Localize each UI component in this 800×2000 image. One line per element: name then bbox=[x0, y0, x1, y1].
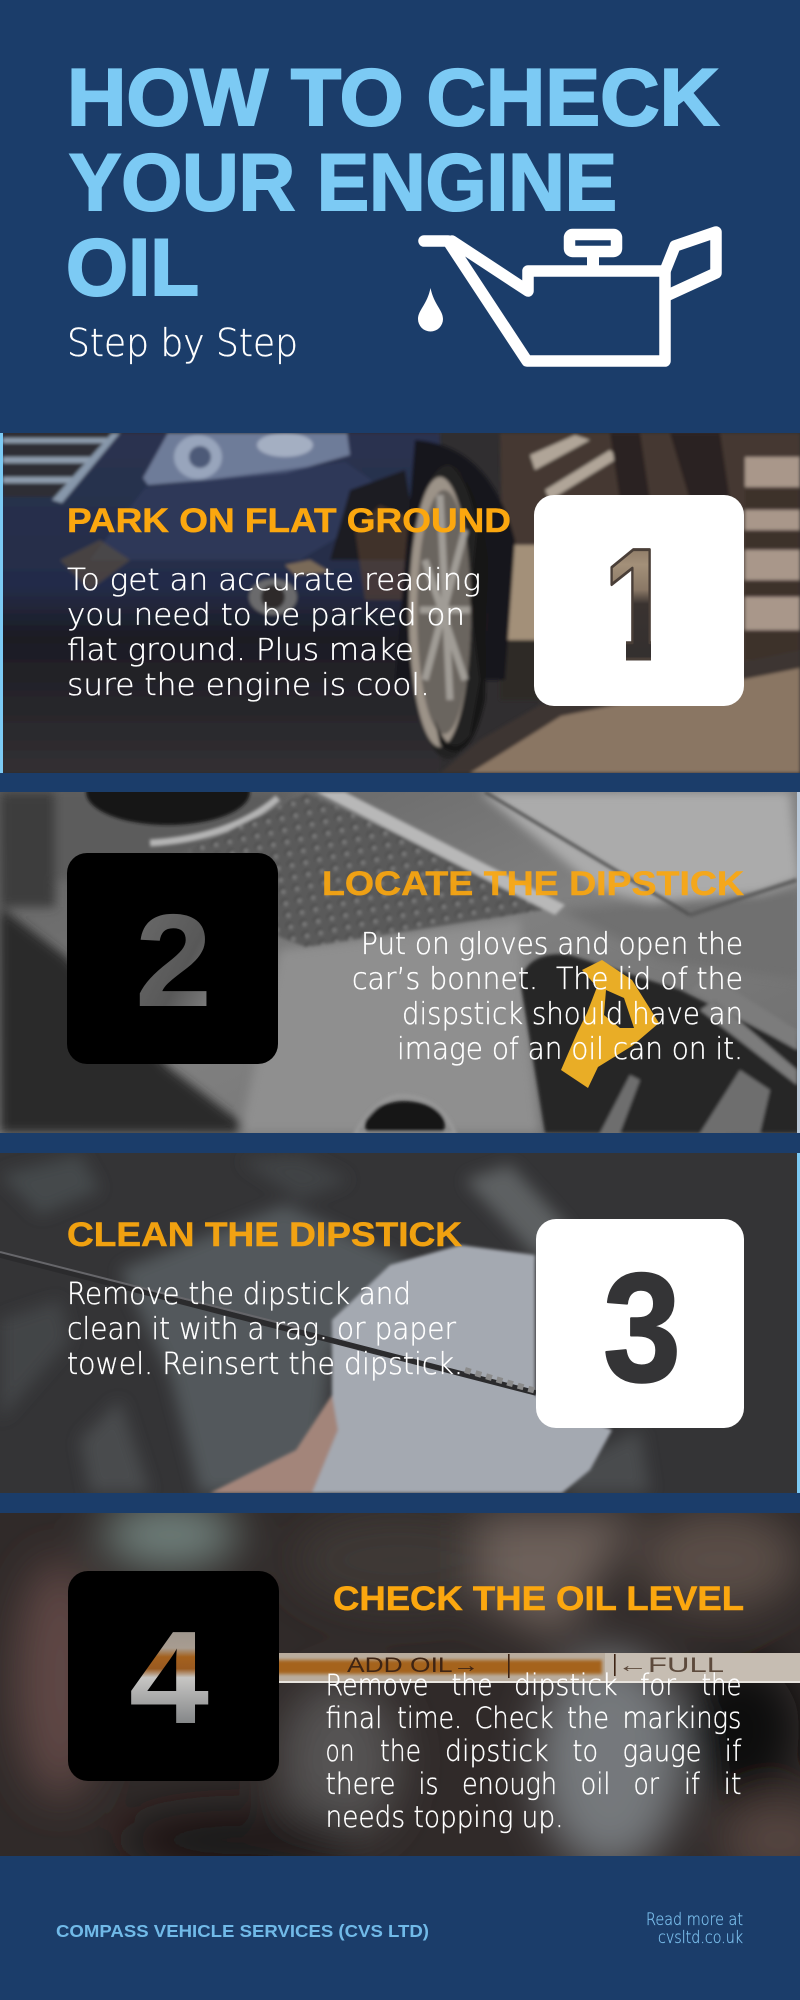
company name: COMPASS VEHICLE SERVICES (CVS LTD) bbox=[56, 1921, 429, 1941]
accent strip bbox=[797, 792, 800, 1133]
body text: the bbox=[702, 1668, 742, 1702]
body text: if bbox=[724, 1734, 742, 1768]
number card 3: 3 bbox=[603, 1241, 681, 1414]
yellow dipstick handle bbox=[561, 960, 659, 1088]
body text: dipstick bbox=[514, 1668, 618, 1702]
footer bbox=[56, 1910, 743, 1947]
panel: step 4 check the oil level bbox=[0, 1501, 800, 1880]
title: OIL bbox=[66, 223, 199, 313]
number card 3 bbox=[536, 1219, 744, 1428]
body text: enough bbox=[462, 1767, 557, 1801]
body text: To get an accurate reading bbox=[67, 563, 481, 598]
body text bbox=[326, 1668, 742, 1834]
accent strip bbox=[0, 433, 3, 773]
panel: step 1 park on flat ground bbox=[0, 433, 800, 773]
dipstick bbox=[279, 1653, 800, 1683]
body text: dispstick should have an bbox=[402, 997, 743, 1032]
body text: car’s bonnet. The lid of the bbox=[352, 962, 743, 997]
body text: gauge bbox=[622, 1734, 702, 1768]
body text: oil bbox=[580, 1767, 610, 1801]
body text: dipstick bbox=[445, 1734, 548, 1768]
icon: oil drop bbox=[418, 288, 443, 331]
body text: time. bbox=[397, 1701, 462, 1735]
body text: Put on gloves and open the bbox=[361, 927, 743, 962]
title bbox=[66, 53, 719, 313]
heading: CHECK THE OIL LEVEL bbox=[333, 1580, 744, 1618]
dipstick: ←FULL bbox=[617, 1654, 724, 1677]
body text: sure the engine is cool. bbox=[67, 668, 430, 703]
body text: towel. Reinsert the dipstick. bbox=[67, 1347, 463, 1382]
body text: needs topping up. bbox=[326, 1800, 564, 1834]
body text: Check bbox=[474, 1701, 554, 1735]
body text: if bbox=[684, 1767, 701, 1801]
body text: the bbox=[380, 1734, 421, 1768]
wheel arch and tyre bbox=[395, 440, 515, 680]
dipstick markings: ADD OIL→ bbox=[347, 1654, 479, 1677]
headlight bbox=[143, 433, 350, 485]
read more link: cvsltd.co.uk bbox=[658, 1928, 743, 1947]
body text bbox=[67, 1277, 463, 1382]
number card 2 bbox=[67, 853, 278, 1064]
body text: for bbox=[640, 1668, 676, 1702]
read more link bbox=[646, 1910, 743, 1947]
accent strip bbox=[797, 1153, 800, 1493]
title: HOW TO CHECK bbox=[67, 53, 719, 143]
body text bbox=[67, 563, 481, 703]
photo: parked car bbox=[0, 433, 800, 773]
heading: LOCATE THE DIPSTICK bbox=[322, 865, 744, 903]
body text: Remove bbox=[326, 1668, 428, 1702]
photo: dipstick close-up bbox=[0, 1501, 800, 1880]
heading: PARK ON FLAT GROUND bbox=[67, 502, 511, 540]
panel: step 2 locate the dipstick bbox=[0, 792, 800, 1133]
body text: there bbox=[326, 1767, 396, 1801]
number card 1: 1 bbox=[603, 515, 673, 693]
body text: the bbox=[452, 1668, 492, 1702]
body text bbox=[352, 927, 743, 1067]
read more link: Read more at bbox=[646, 1910, 743, 1929]
body text: image of an oil can on it. bbox=[397, 1032, 743, 1067]
body text: Remove the dipstick and bbox=[67, 1277, 411, 1312]
body text: final bbox=[326, 1701, 382, 1735]
body text: to bbox=[572, 1734, 598, 1768]
body text: on bbox=[326, 1734, 354, 1768]
body text: the bbox=[567, 1701, 609, 1735]
body text: markings bbox=[622, 1701, 742, 1735]
number card 2: 2 bbox=[135, 887, 212, 1034]
body text: or bbox=[634, 1767, 659, 1801]
body text: clean it with a rag. or paper bbox=[67, 1312, 457, 1347]
number card 4: 4 bbox=[129, 1604, 209, 1751]
subtitle: Step by Step bbox=[67, 321, 298, 365]
heading: CLEAN THE DIPSTICK bbox=[67, 1216, 462, 1254]
panel: step 3 clean the dipstick bbox=[0, 1153, 800, 1493]
header panel bbox=[66, 53, 719, 365]
photo: cleaning the dipstick bbox=[0, 1153, 800, 1493]
title: YOUR ENGINE bbox=[69, 138, 617, 228]
body text: flat ground. Plus make bbox=[67, 633, 414, 668]
photo: engine bay bbox=[0, 792, 797, 1133]
body text: it bbox=[724, 1767, 742, 1801]
body text: is bbox=[418, 1767, 438, 1801]
body text: you need to be parked on bbox=[67, 598, 465, 633]
grille bbox=[3, 433, 112, 497]
icon: oil can bbox=[424, 232, 716, 361]
number card 4 bbox=[68, 1571, 279, 1781]
number card 1 bbox=[534, 495, 744, 706]
